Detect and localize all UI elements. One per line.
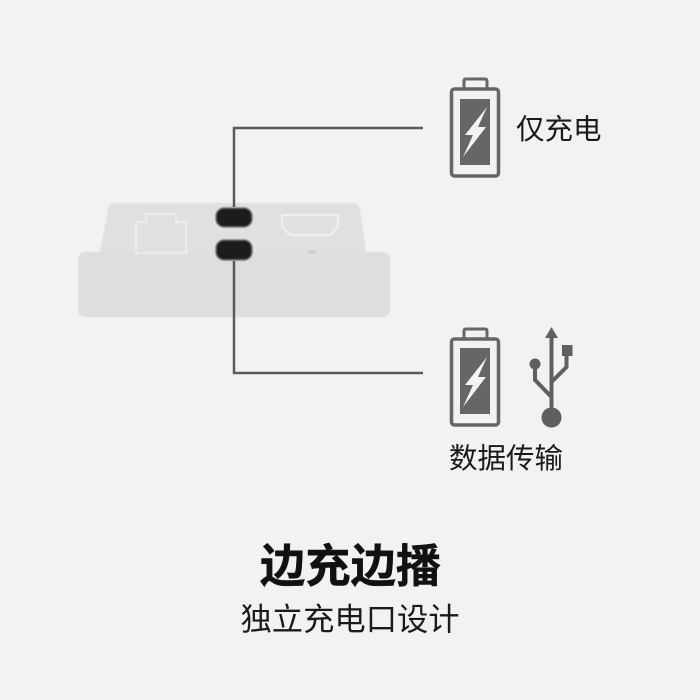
- label: charge only: 仅充电: [516, 114, 602, 146]
- top usb-c port: [216, 208, 252, 227]
- bottom usb-c port: [216, 240, 252, 260]
- title: 边充边播: [260, 541, 441, 592]
- subtitle: 独立充电口设计: [240, 602, 460, 637]
- icon: battery data transfer: [452, 329, 498, 425]
- ethernet port: [136, 214, 186, 253]
- icon: usb symbol: [530, 327, 572, 428]
- connector line: bottom port to data transfer: [234, 261, 423, 373]
- device illustration: [78, 203, 390, 317]
- device upper body: [100, 203, 366, 252]
- device lower body: [78, 252, 390, 317]
- connector line: top port to charge only: [234, 128, 423, 207]
- hdmi port: [282, 215, 338, 235]
- indicator light: [309, 251, 315, 253]
- icon: battery charge only: [452, 79, 498, 176]
- label: data transfer: 数据传输: [449, 443, 563, 475]
